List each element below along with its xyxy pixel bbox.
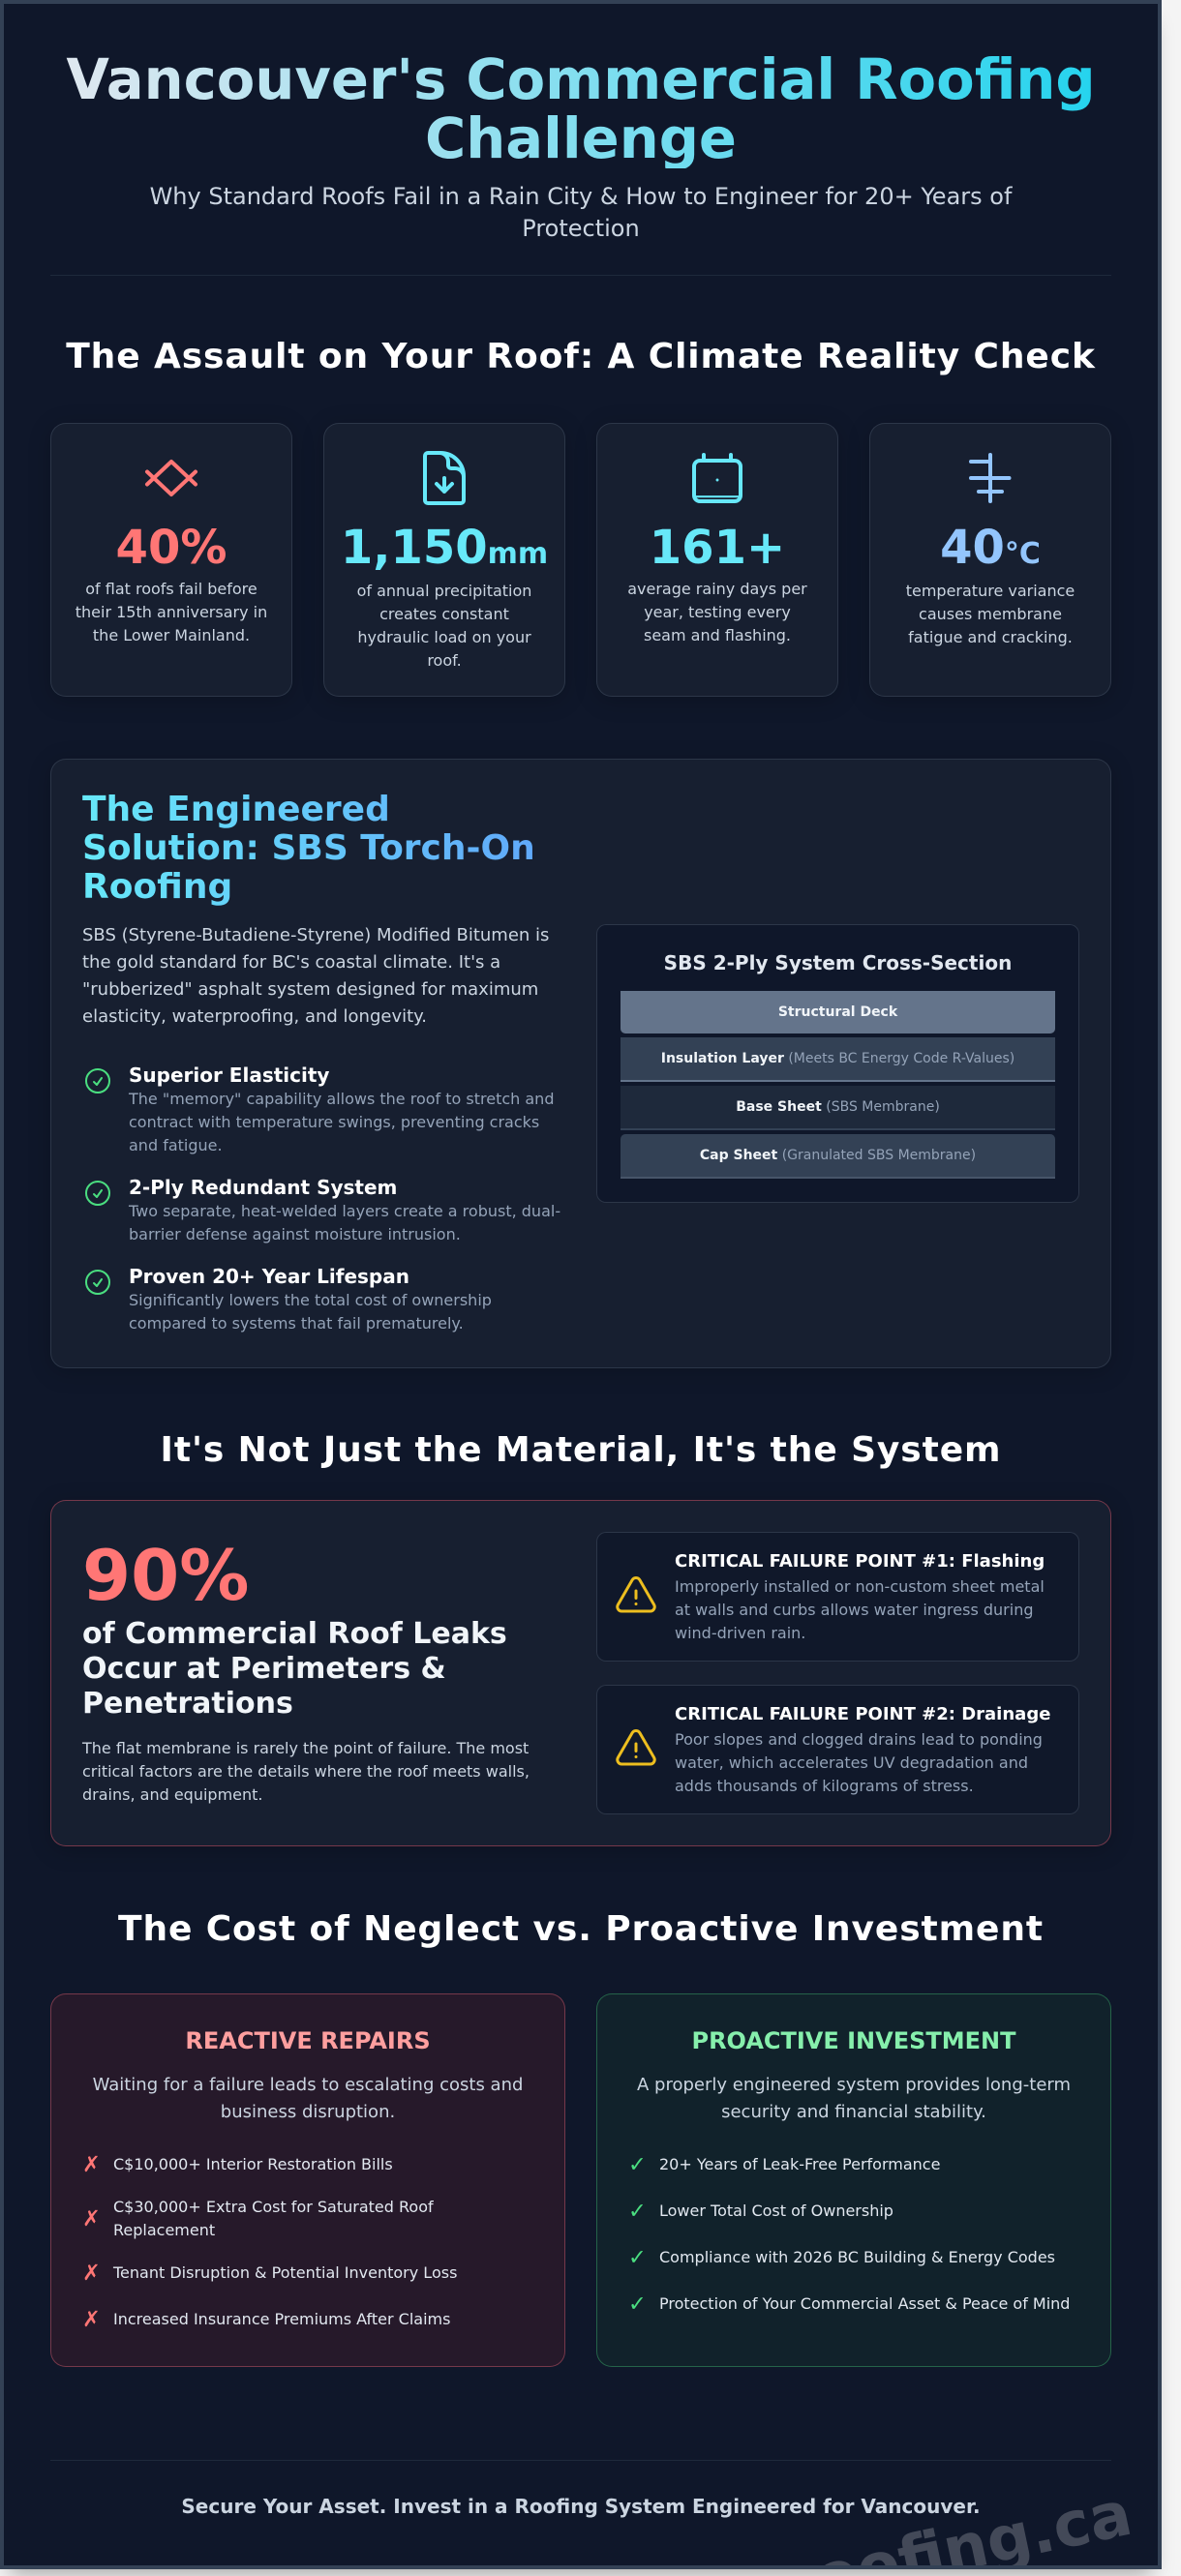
big stat: 90% [82, 1535, 249, 1616]
item: tenant disruption [82, 2261, 457, 2286]
solution heading [82, 791, 565, 907]
benefit title: 2-Ply Redundant System [129, 1176, 397, 1199]
item: compliance: ✓ [628, 2245, 647, 2270]
item: saturated roof: C$30,000+ Extra Cost for Saturated Roof [113, 2198, 434, 2216]
column intro: Waiting for a failure leads to escalating costs and [93, 2075, 523, 2095]
stat description [357, 582, 531, 670]
column intro: A properly engineered system provides long-term [637, 2075, 1071, 2095]
benefit text [129, 1291, 492, 1333]
stat body text [81, 1739, 530, 1804]
solution intro: "rubberized" asphalt system designed for maximum [82, 979, 538, 1000]
solution intro: SBS (Styrene-Butadiene-Styrene) Modified Bitumen is [82, 925, 549, 944]
stat body text: drains, and equipment. [82, 1785, 263, 1804]
stat card: 40°C [869, 423, 1111, 697]
stat body text: The flat membrane is rarely the point of failure. The most [82, 1739, 529, 1757]
icon: calendar [692, 453, 742, 503]
item: saturated roof: ✗ [82, 2206, 101, 2232]
item: insurance premiums: Increased Insurance Premiums After Claims [113, 2310, 450, 2328]
stat number: 1,150mm [341, 521, 548, 575]
stat description: fatigue and cracking. [908, 628, 1073, 646]
title: Vancouver's Commercial Roofing [66, 47, 1096, 112]
failure title: CRITICAL FAILURE POINT #1: Flashing [675, 1551, 1045, 1572]
benefit title: Proven 20+ Year Lifespan [129, 1265, 409, 1288]
icon: warning [616, 1576, 656, 1612]
heading: climate reality check: The Assault on Your Roof: A Climate Reality Check [66, 337, 1096, 376]
failure text: water, which accelerates UV degradation and [675, 1753, 1028, 1772]
item: total cost: Lower Total Cost of Ownership [659, 2202, 893, 2220]
stat description: creates constant [379, 605, 509, 623]
item: insurance premiums [82, 2307, 450, 2332]
subtitle: Protection [522, 215, 640, 242]
layer: structural deck [621, 991, 1055, 1033]
layer: insulation: Insulation Layer (Meets BC Energy Code R-Values) [661, 1051, 1014, 1066]
item: compliance [628, 2245, 1055, 2270]
layer: insulation [621, 1037, 1055, 1082]
failure text: Improperly installed or non-custom sheet metal [675, 1577, 1045, 1596]
stat description: of annual precipitation [357, 582, 531, 600]
column intro [93, 2075, 523, 2122]
stat description [906, 582, 1075, 646]
icon: check circle [85, 1181, 110, 1206]
benefit text: compared to systems that fail prematurely. [129, 1314, 464, 1333]
icon: check circle [85, 1068, 110, 1093]
layer: cap sheet [621, 1134, 1055, 1179]
stat card: 40% [50, 423, 292, 697]
failure text [675, 1577, 1045, 1642]
failure text: adds thousands of kilograms of stress. [675, 1777, 974, 1795]
heading: the system: It's Not Just the Material, It's the System [161, 1430, 1001, 1470]
stat description: seam and flashing. [644, 626, 791, 644]
icon: broken diamond [145, 459, 197, 497]
layer: cap sheet: Cap Sheet (Granulated SBS Membrane) [700, 1148, 976, 1163]
stat description: roof. [427, 651, 462, 670]
benefit text: contract with temperature swings, preventing cracks [129, 1113, 539, 1131]
item: saturated roof: Replacement [113, 2221, 215, 2239]
solution heading: Solution: SBS Torch-On [82, 828, 535, 868]
stat description [627, 580, 807, 644]
failure text: Poor slopes and clogged drains lead to ponding [675, 1730, 1043, 1749]
solution intro: elasticity, waterproofing, and longevity. [82, 1006, 427, 1027]
solution heading: The Engineered [82, 790, 390, 829]
stat description: of flat roofs fail before [85, 580, 257, 598]
item: total cost: ✓ [628, 2199, 647, 2224]
failure card: drainage [596, 1685, 1079, 1813]
item: saturated roof [82, 2198, 434, 2239]
item: leak-free [628, 2152, 940, 2177]
panel: reactive repairs [50, 1993, 565, 2367]
stat body text: critical factors are the details where the roof meets walls, [82, 1762, 530, 1781]
item: interior restoration: C$10,000+ Interior Restoration Bills [113, 2155, 393, 2173]
title [50, 50, 1111, 168]
failure text: at walls and curbs allows water ingress during [675, 1601, 1034, 1619]
solution heading: Roofing [82, 867, 232, 907]
icon: temperature [969, 453, 1011, 503]
failure card: flashing [596, 1532, 1079, 1661]
item: protection: Protection of Your Commercial Asset & Peace of Mind [659, 2294, 1070, 2313]
column intro [637, 2075, 1071, 2122]
diagram: SBS cross-section [596, 924, 1079, 1203]
stat headline [82, 1617, 507, 1721]
layer: base sheet [621, 1086, 1055, 1130]
stat description [76, 580, 267, 644]
item: leak-free: ✓ [628, 2152, 647, 2177]
layer: structural deck: Structural Deck [778, 1004, 897, 1020]
diagram title: SBS 2-Ply System Cross-Section [664, 951, 1012, 974]
item: leak-free: 20+ Years of Leak-Free Performance [659, 2155, 940, 2173]
stat description: causes membrane [919, 605, 1062, 623]
item: interior restoration: ✗ [82, 2152, 101, 2177]
stat number: 40°C [940, 521, 1041, 575]
stat headline: Occur at Perimeters & [82, 1652, 446, 1686]
panel: 90% of leaks [50, 1500, 1111, 1846]
benefit text: barrier defense against moisture intrusion. [129, 1225, 461, 1243]
header [66, 47, 1096, 242]
stat description: their 15th anniversary in [76, 603, 267, 621]
layer: base sheet: Base Sheet (SBS Membrane) [736, 1099, 940, 1115]
benefit text: Significantly lowers the total cost of ownership [129, 1291, 492, 1309]
column heading: PROACTIVE INVESTMENT [691, 2027, 1016, 2054]
benefit text: and fatigue. [129, 1136, 223, 1154]
item: interior restoration [82, 2152, 393, 2177]
column intro: business disruption. [221, 2102, 395, 2122]
item: tenant disruption: ✗ [82, 2261, 101, 2286]
stat description: year, testing every [644, 603, 791, 621]
stat headline: Penetrations [82, 1687, 293, 1721]
stat number: 40% [116, 521, 227, 575]
item: protection: ✓ [628, 2291, 647, 2317]
benefit text: Two separate, heat-welded layers create a robust, dual- [129, 1202, 560, 1220]
icon: document arrow down [423, 451, 466, 505]
solution intro [82, 925, 549, 1027]
item: compliance: Compliance with 2026 BC Building & Energy Codes [659, 2248, 1055, 2266]
benefit text [128, 1090, 554, 1154]
panel: proactive investment [596, 1993, 1111, 2367]
item: total cost [628, 2199, 893, 2224]
stat card: 1,150mm [323, 423, 565, 697]
icon: check circle [85, 1270, 110, 1295]
panel: engineered solution [50, 759, 1111, 1368]
failure text: wind-driven rain. [675, 1624, 805, 1642]
item: insurance premiums: ✗ [82, 2307, 101, 2332]
column heading: REACTIVE REPAIRS [185, 2027, 431, 2054]
stat description: temperature variance [906, 582, 1075, 600]
column intro: security and financial stability. [721, 2102, 986, 2122]
failure title: CRITICAL FAILURE POINT #2: Drainage [675, 1704, 1050, 1724]
stat card: 161+ [596, 423, 838, 697]
footer call to action: Secure Your Asset. Invest in a Roofing System Engineered for Vancouver. [181, 2495, 981, 2518]
icon: warning [616, 1729, 656, 1765]
stat description: hydraulic load on your [357, 628, 531, 646]
failure text [675, 1730, 1043, 1795]
stat description: the Lower Mainland. [93, 626, 250, 644]
benefit title: Superior Elasticity [129, 1063, 329, 1087]
solution intro: the gold standard for BC's coastal climate. It's a [82, 952, 500, 973]
heading: cost of neglect: The Cost of Neglect vs. Proactive Investment [118, 1909, 1044, 1949]
stat number: 161+ [650, 521, 785, 575]
benefit text [128, 1202, 560, 1243]
subtitle [150, 183, 1013, 242]
item: tenant disruption: Tenant Disruption & Potential Inventory Loss [113, 2263, 457, 2282]
stat description: average rainy days per [627, 580, 807, 598]
benefit text: The "memory" capability allows the roof to stretch and [129, 1090, 554, 1108]
item: protection [628, 2291, 1070, 2317]
subtitle: Why Standard Roofs Fail in a Rain City & How to Engineer for 20+ Years of [150, 183, 1012, 210]
stat headline: of Commercial Roof Leaks [82, 1617, 507, 1651]
title: Challenge [425, 106, 737, 171]
